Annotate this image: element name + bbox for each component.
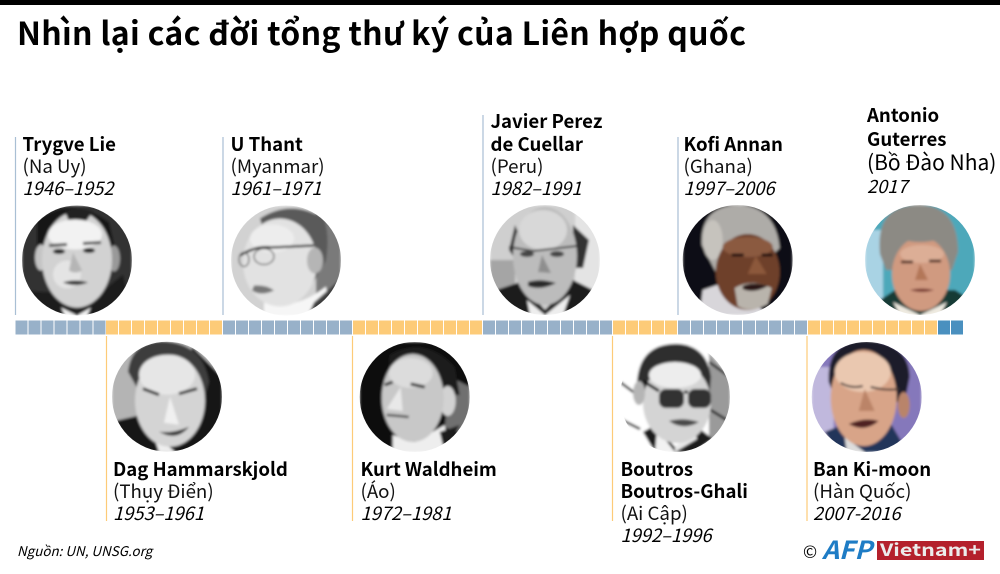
label: Dag Hammarskjold: Dag Hammarskjold xyxy=(113,455,288,482)
label: Javier Perez de Cuellar: (Peru) xyxy=(490,152,543,179)
label: Antonio Guterres: Antonio xyxy=(866,101,939,128)
label: Antonio Guterres: 2017 xyxy=(867,173,910,199)
title: Nhìn lại các đời tổng thư ký của Liên hợp quốc xyxy=(17,9,746,55)
label: Kofi Annan: (Ghana) xyxy=(684,152,753,179)
label: Kurt Waldheim: 1972–1981 xyxy=(360,500,451,526)
label: Trygve Lie xyxy=(22,130,116,201)
logo: AFP: © xyxy=(803,538,817,563)
top bar xyxy=(0,0,1000,5)
logo: AFP xyxy=(803,531,876,567)
label: Kurt Waldheim: (Áo) xyxy=(360,477,396,504)
label: U Thant: (Myanmar) xyxy=(230,152,325,179)
label: Kofi Annan: 1997–2006 xyxy=(684,175,777,201)
label: Ban Ki-moon xyxy=(813,455,931,526)
label: Javier Perez de Cuellar: Javier Perez xyxy=(490,107,602,134)
photo: Trygve Lie xyxy=(22,206,132,316)
photo: Javier Perez de Cuellar xyxy=(490,205,600,315)
label: Trygve Lie: (Na Uy) xyxy=(22,152,87,179)
label: Dag Hammarskjold xyxy=(113,455,288,526)
label: Javier Perez de Cuellar: de Cuellar xyxy=(490,130,584,157)
photo: Kurt Waldheim xyxy=(360,342,470,452)
label: Antonio Guterres: (Bồ Đào Nha) xyxy=(867,147,996,177)
label: Ban Ki-moon: 2007-2016 xyxy=(813,500,903,526)
source: Nguồn: UN, UNSG.org xyxy=(17,540,155,560)
photo: U Thant xyxy=(231,206,341,316)
label: Ban Ki-moon: Ban Ki-moon xyxy=(813,455,931,482)
label: Dag Hammarskjold: 1953–1961 xyxy=(113,500,204,526)
logo: AFP: AFP xyxy=(821,531,876,567)
label: Antonio Guterres xyxy=(866,101,996,199)
label: U Thant: 1961–1971 xyxy=(230,175,321,201)
label: Ban Ki-moon: (Hàn Quốc) xyxy=(813,477,911,504)
photo: Antonio Guterres xyxy=(865,205,975,315)
label: Javier Perez de Cuellar: 1982–1991 xyxy=(490,175,581,201)
label: Dag Hammarskjold: (Thụy Điển) xyxy=(113,477,214,504)
label: Trygve Lie: 1946–1952 xyxy=(22,175,115,201)
label: Javier Perez de Cuellar xyxy=(490,107,602,201)
photo: Dag Hammarskjold xyxy=(112,341,222,452)
label: Boutros Boutros-Ghali: 1992–1996 xyxy=(620,522,714,548)
label: Boutros Boutros-Ghali: Boutros-Ghali xyxy=(620,477,748,504)
photo: Ban Ki-moon xyxy=(812,341,922,452)
label: Kofi Annan xyxy=(684,130,783,201)
label: Kofi Annan: Kofi Annan xyxy=(684,130,783,157)
logo: Vietnam+: Vietnam+ xyxy=(879,536,981,561)
label: Boutros Boutros-Ghali xyxy=(620,455,748,548)
label: Kurt Waldheim: Kurt Waldheim xyxy=(360,455,497,482)
label: Kurt Waldheim xyxy=(360,455,497,526)
timeline bar xyxy=(16,320,963,334)
label: U Thant: U Thant xyxy=(230,130,303,157)
label: Boutros Boutros-Ghali: Boutros xyxy=(620,455,693,482)
photo: Kofi Annan xyxy=(683,205,793,315)
label: Antonio Guterres: Guterres xyxy=(867,125,946,152)
photo: Boutros Boutros-Ghali xyxy=(620,342,730,452)
label: Trygve Lie: Trygve Lie xyxy=(22,130,116,157)
label: U Thant xyxy=(230,130,325,201)
label: Boutros Boutros-Ghali: (Ai Cập) xyxy=(620,499,688,526)
